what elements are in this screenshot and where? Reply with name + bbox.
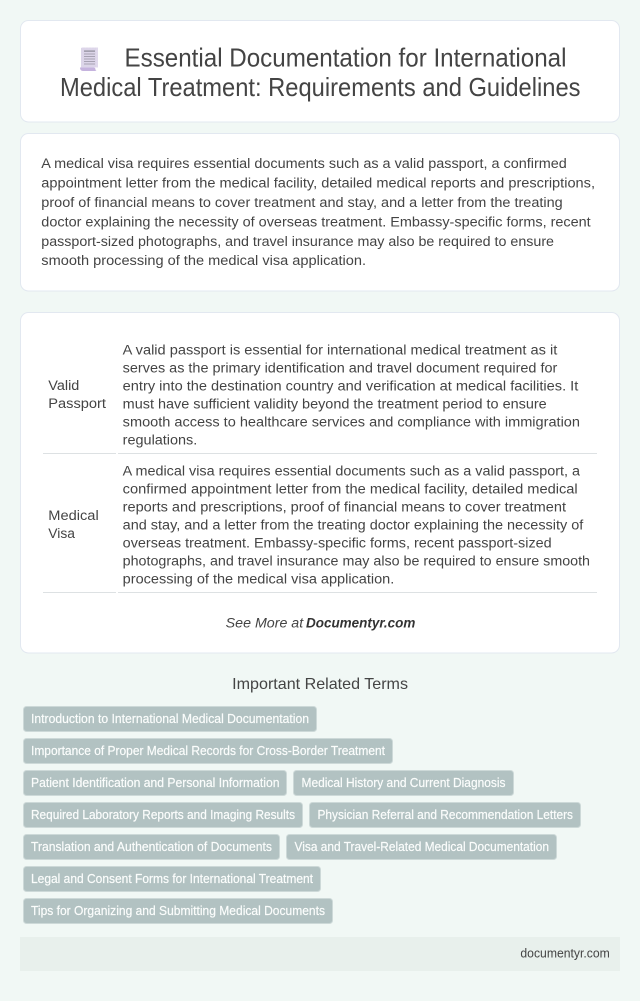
row description: valid passport: entry into the destination country and verification at medical facilities. It [123,378,578,394]
row description: valid passport: regulations. [123,432,197,448]
tag: Patient Identification and Personal Information [31,776,280,790]
tag [286,834,556,860]
footer text: documentyr.com [520,946,610,961]
row description: valid passport: must have sufficient validity beyond the treatment period to ensure [123,396,547,412]
row description: medical visa: reports and prescriptions, proof of financial means to cover treatment [123,499,566,515]
tag: Importance of Proper Medical Records for Cross-Border Treatment [31,744,385,758]
tag [24,834,280,860]
related terms tags [24,706,580,924]
tag: Tips for Organizing and Submitting Medical Documents [31,904,325,918]
tag [310,802,580,828]
summary paragraph [41,156,595,269]
tag: Medical History and Current Diagnosis [302,776,506,790]
row description: valid passport: smooth access to healthcare services and compliance with immigration [123,414,580,430]
row description: medical visa: A medical visa requires essential documents such as a valid passport, a [123,463,580,479]
tag: Visa and Travel-Related Medical Documentation [294,840,549,854]
icon: document scroll [80,48,98,71]
tag [24,738,392,764]
summary paragraph: passport-sized photographs, and travel insurance may also be required to ensure [41,234,554,250]
tag [24,706,316,732]
summary paragraph: proof of financial means to cover treatment and stay, and a letter from the treating [41,195,563,211]
summary paragraph: smooth processing of the medical visa application. [41,253,366,269]
row label: valid passport [48,378,106,412]
summary paragraph: doctor explaining the necessity of overseas treatment. Embassy-specific forms, recent [41,214,591,230]
tag: Legal and Consent Forms for International Treatment [31,872,313,886]
tag: Required Laboratory Reports and Imaging Results [31,808,295,822]
summary paragraph: appointment letter from the medical facility, detailed medical reports and prescriptions, [41,175,595,191]
row label: medical visa [48,508,99,542]
title text: Essential Documentation for International [124,42,566,72]
title text [60,42,580,102]
tag: Translation and Authentication of Documents [31,840,272,854]
footer bar [20,937,620,971]
see more link [226,616,416,632]
row description: medical visa [123,463,590,587]
panel: documents table [20,312,620,653]
tag: Introduction to International Medical Documentation [31,712,309,726]
row label: valid passport: Passport [48,396,106,412]
row description: valid passport: A valid passport is essential for international medical treatment as it [123,342,557,358]
title text: Medical Treatment: Requirements and Guidelines [60,72,580,102]
row label: valid passport: Valid [48,378,79,394]
row description: valid passport [123,342,580,448]
tag [24,898,332,924]
row description: medical visa: photographs, and travel insurance may also be required to ensure smooth [123,553,590,569]
row label: medical visa: Visa [48,526,75,542]
row label: medical visa: Medical [48,508,99,524]
panel: summary [20,134,620,291]
panel: title [20,20,620,122]
summary paragraph: A medical visa requires essential documents such as a valid passport, a confirmed [41,156,567,172]
row description: medical visa: and stay, and a letter from the treating doctor explaining the necessity of [123,517,583,533]
tag [24,770,286,796]
row description: valid passport: serves as the primary identification and travel document required for [123,360,558,376]
row description: medical visa: confirmed appointment letter from the medical facility, detailed medical [123,481,578,497]
table row: valid passport [48,342,580,448]
table row: medical visa [48,463,590,587]
heading: important related terms: Important Related Terms [232,676,408,693]
row description: medical visa: processing of the medical visa application. [123,571,394,587]
see more link: See More at [226,616,304,632]
row description: medical visa: overseas treatment. Embassy-specific forms, recent passport-sized [123,535,552,551]
tag: Physician Referral and Recommendation Letters [318,808,573,822]
tag [24,802,302,828]
see more link: Documentyr.com [306,616,416,632]
tag [24,866,320,892]
tag [294,770,514,796]
